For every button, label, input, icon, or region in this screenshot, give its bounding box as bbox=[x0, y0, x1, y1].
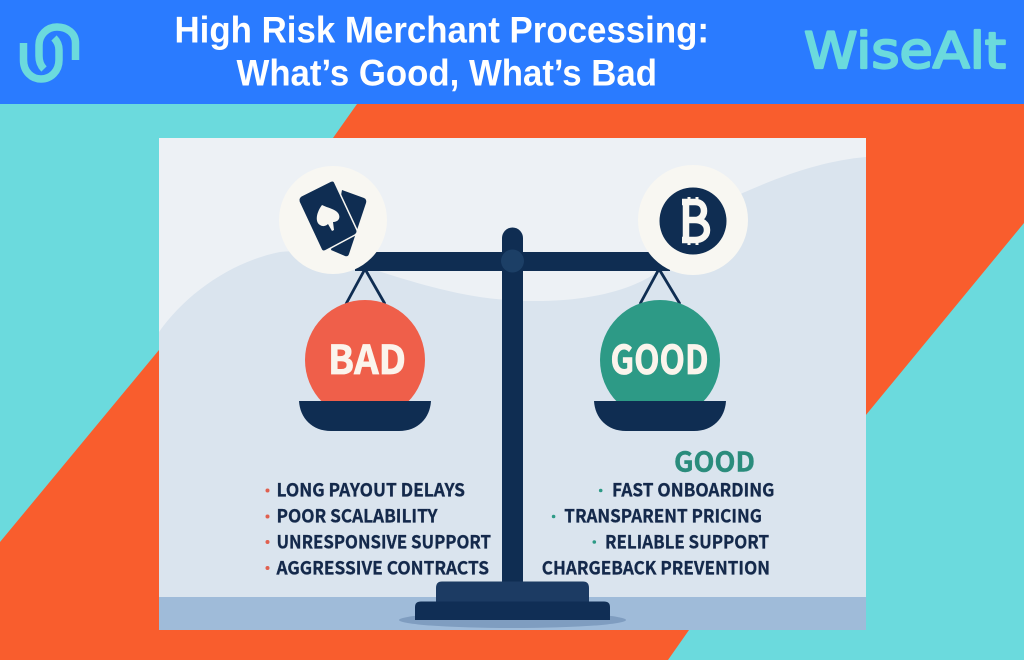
icon: playing cards bbox=[279, 166, 387, 274]
left weight: bad bbox=[305, 300, 425, 420]
title bbox=[174, 10, 709, 94]
bad items: UNRESPONSIVE SUPPORT bbox=[276, 528, 491, 554]
panel wave bbox=[159, 157, 866, 598]
left pan bbox=[299, 401, 431, 431]
bad items: POOR SCALABILITY bbox=[276, 503, 438, 529]
right weight: good bbox=[600, 300, 720, 420]
post bbox=[502, 228, 523, 582]
good items: RELIABLE SUPPORT bbox=[605, 528, 769, 554]
beam bbox=[355, 252, 670, 271]
good items: CHARGEBACK PREVENTION bbox=[542, 554, 770, 580]
hub bbox=[501, 250, 524, 272]
base upper bbox=[436, 582, 589, 602]
bad items bbox=[276, 477, 491, 580]
icon: bitcoin bbox=[638, 165, 748, 275]
panel: illustration bbox=[159, 138, 866, 630]
scale bbox=[355, 228, 670, 628]
left weight: bad: BAD bbox=[328, 328, 406, 386]
good list bbox=[542, 441, 774, 580]
panel background bbox=[159, 138, 866, 630]
title: What’s Good, What’s Bad bbox=[236, 52, 657, 94]
good items: TRANSPARENT PRICING bbox=[564, 503, 762, 529]
base shadow bbox=[399, 612, 626, 628]
title: High Risk Merchant Processing: bbox=[174, 10, 709, 50]
good bullets bbox=[552, 489, 602, 544]
good heading: GOOD bbox=[674, 441, 755, 480]
left hanger bbox=[346, 269, 385, 304]
bad items: AGGRESSIVE CONTRACTS bbox=[276, 554, 489, 580]
bad list bbox=[266, 477, 491, 580]
good items: FAST ONBOARDING bbox=[612, 477, 774, 503]
base lower bbox=[415, 602, 610, 620]
floor bbox=[159, 597, 866, 630]
right pan bbox=[594, 401, 726, 431]
good items bbox=[542, 477, 774, 580]
brand wordmark: WiseAlt bbox=[804, 22, 1006, 80]
right weight: good: GOOD bbox=[610, 328, 708, 386]
bad items: LONG PAYOUT DELAYS bbox=[276, 477, 465, 503]
icon: brand mark bbox=[24, 27, 76, 79]
bullets bbox=[266, 488, 270, 570]
header bar bbox=[0, 0, 1024, 104]
right hanger bbox=[640, 269, 680, 304]
